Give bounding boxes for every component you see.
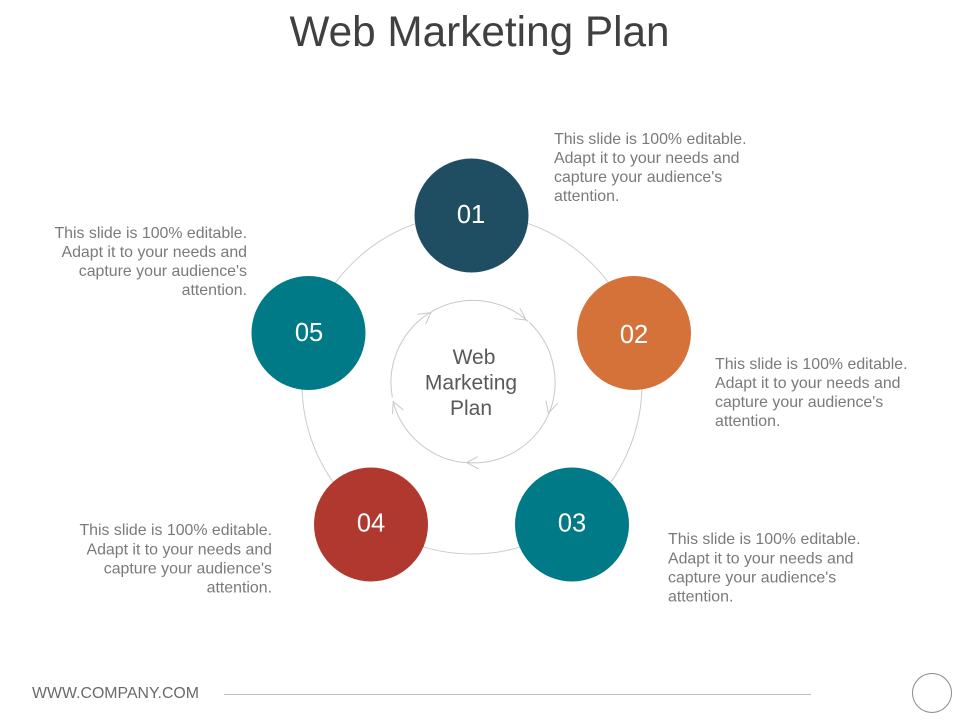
- text block 02: capture your audience's: [715, 394, 883, 411]
- text block 02: Adapt it to your needs and: [715, 375, 901, 392]
- text block 01: This slide is 100% editable.: [554, 131, 747, 148]
- text block 04: [79, 522, 272, 596]
- text block 02: attention.: [715, 413, 780, 430]
- center label: Plan: [450, 397, 492, 420]
- step 01 circle: 01: [457, 201, 485, 229]
- center label: Web: [453, 346, 495, 369]
- step 04 circle: 04: [357, 510, 385, 538]
- text block 04: This slide is 100% editable.: [79, 522, 272, 539]
- step 05 circle: 05: [295, 319, 323, 347]
- step 01 circle: [414, 158, 528, 272]
- step 02 circle: 02: [620, 321, 648, 349]
- text block 02: [715, 356, 908, 430]
- text block 01: attention.: [554, 188, 619, 205]
- footer divider: [224, 694, 811, 696]
- outer ring connecting the steps: [302, 214, 642, 554]
- text block 04: capture your audience's: [104, 560, 272, 578]
- text block 03: attention.: [668, 588, 733, 606]
- center cycle arrows: [391, 300, 558, 469]
- step 05 circle: [252, 276, 366, 390]
- step 03 circle: 03: [558, 510, 586, 538]
- text block 05: capture your audience's: [79, 263, 247, 280]
- text block 04: Adapt it to your needs and: [86, 542, 272, 558]
- footer url: WWW.COMPANY.COM: [32, 685, 199, 702]
- step 04 circle: [314, 468, 428, 582]
- title: Web Marketing Plan: [289, 8, 670, 55]
- text block 05: attention.: [182, 282, 247, 299]
- text block 03: This slide is 100% editable.: [668, 531, 861, 548]
- footer page circle: [912, 674, 952, 712]
- step 03 circle: [515, 468, 629, 582]
- step 02 circle: [577, 276, 691, 390]
- text block 03: Adapt it to your needs and: [668, 550, 854, 568]
- text block 05: [54, 225, 247, 299]
- text block 05: Adapt it to your needs and: [61, 244, 247, 261]
- text block 01: capture your audience's: [554, 169, 722, 186]
- text block 04: attention.: [207, 580, 272, 596]
- text block 01: Adapt it to your needs and: [554, 150, 740, 167]
- center label: [425, 346, 517, 420]
- text block 05: This slide is 100% editable.: [54, 225, 247, 242]
- text block 01: [554, 131, 747, 205]
- text block 03: [668, 531, 861, 606]
- text block 02: This slide is 100% editable.: [715, 356, 908, 373]
- center label: Marketing: [425, 372, 517, 394]
- text block 03: capture your audience's: [668, 570, 836, 586]
